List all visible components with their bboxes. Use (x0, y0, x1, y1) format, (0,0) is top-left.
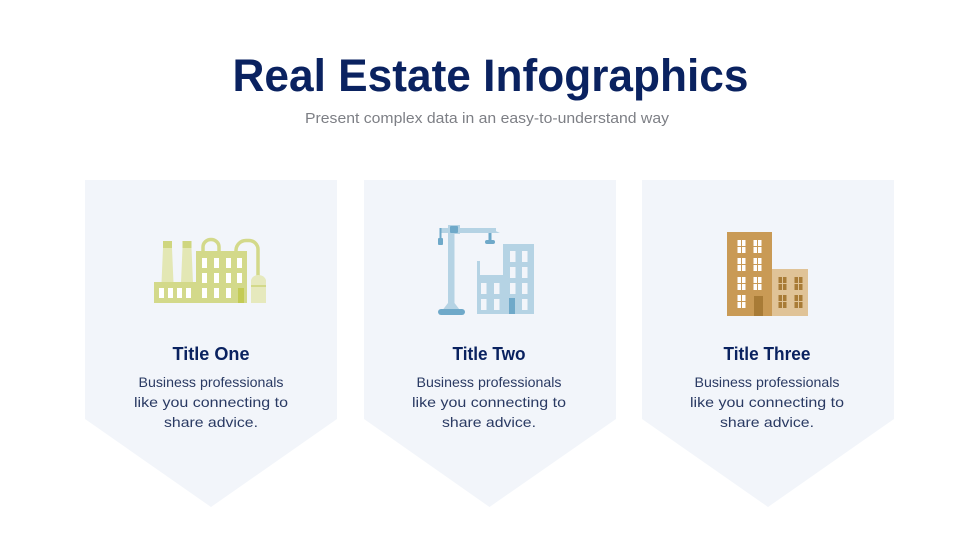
panel: title two (364, 180, 616, 507)
heading: title two: Title Two (452, 344, 526, 364)
text: description three: Business professionals (694, 374, 840, 390)
heading: title one: Title One (172, 344, 250, 364)
panel: title one (85, 180, 337, 507)
text: description two: Business professionals (416, 374, 562, 390)
text: description three (690, 374, 844, 430)
heading: title three: Title Three (724, 344, 810, 364)
text: description two: share advice. (442, 414, 536, 430)
text: description one: like you connecting to (134, 394, 288, 410)
text: description one: share advice. (164, 414, 258, 430)
panel: title three (642, 180, 894, 507)
icon: apartment buildings (727, 232, 808, 316)
text: description two (412, 374, 566, 430)
icon: crane and building (438, 225, 534, 315)
text: description three: like you connecting to (690, 394, 844, 410)
text: description one (134, 374, 288, 430)
text: description three: share advice. (720, 414, 814, 430)
text: description one: Business professionals (138, 374, 284, 390)
subtitle: Present complex data in an easy-to-understand way (305, 110, 670, 127)
icon: factory (154, 240, 266, 303)
text: description two: like you connecting to (412, 394, 566, 410)
title: Real Estate Infographics (232, 50, 748, 101)
